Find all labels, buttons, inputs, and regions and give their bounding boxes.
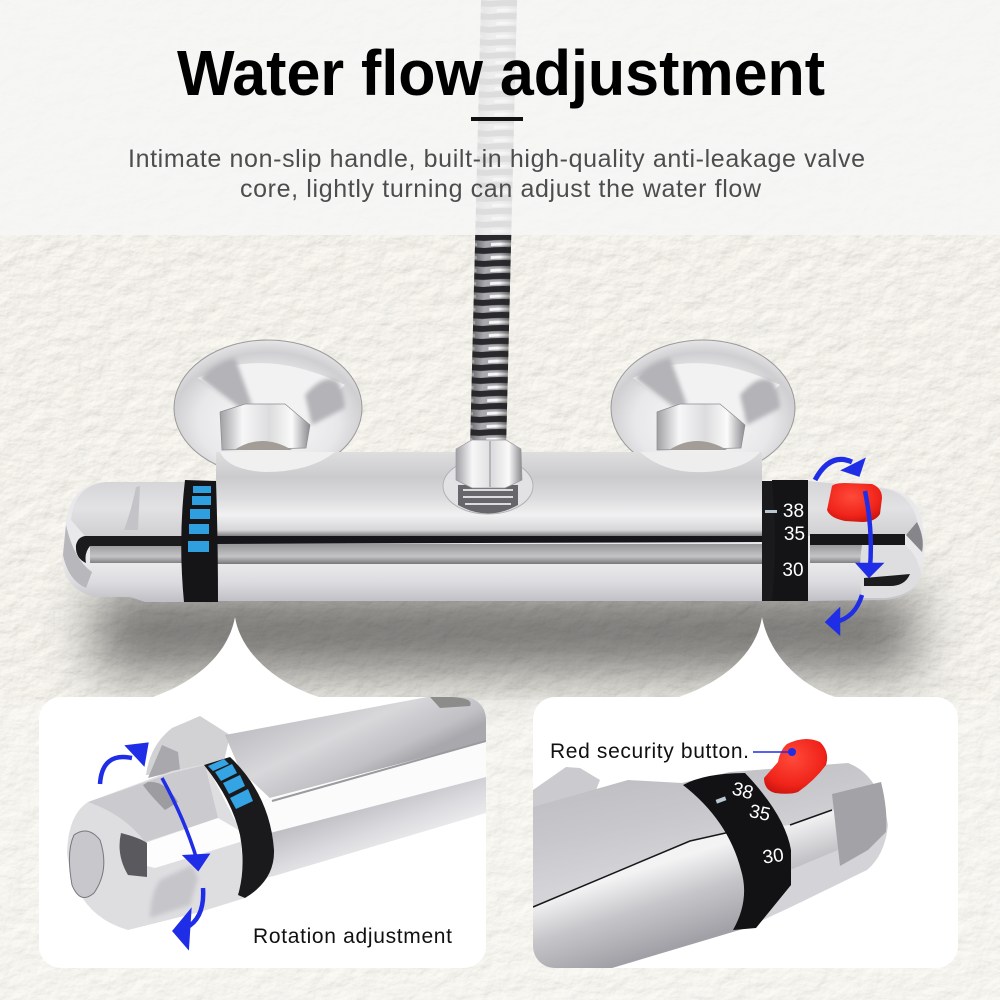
subtitle <box>128 145 865 203</box>
rotation arrows on valve <box>815 459 879 631</box>
temperature ring: 38 <box>783 501 804 522</box>
panel: red security button <box>533 697 958 968</box>
title: Water flow adjustment <box>177 37 825 109</box>
valve body <box>62 440 924 602</box>
valve close-up right: 38 <box>730 779 756 804</box>
right end cap <box>808 481 924 601</box>
top arc arrow <box>815 459 862 480</box>
header band <box>0 0 1000 235</box>
callout pointer left <box>153 617 319 697</box>
label: rotation adjustment: Rotation adjustment <box>253 925 452 948</box>
temperature ring <box>762 480 810 601</box>
left end cap <box>62 482 186 602</box>
shadow under valve <box>95 590 915 672</box>
central body <box>216 452 762 601</box>
temperature ring: 35 <box>784 524 805 545</box>
flexible hose <box>470 0 517 445</box>
middle arrow <box>860 491 879 575</box>
temperature ring: 30 <box>782 560 804 581</box>
subtitle: Intimate non-slip handle, built-in high-quality anti-leakage valve <box>128 145 865 173</box>
label: red security button: Red security button. <box>550 740 749 763</box>
valve close-up right <box>533 763 888 968</box>
valve close-up right: 35 <box>747 801 772 826</box>
red security button <box>827 483 882 522</box>
title underline <box>471 117 523 121</box>
lighter wall at bottom <box>0 700 1000 1000</box>
rotation arrows <box>100 745 206 945</box>
blue scale ring <box>181 480 218 602</box>
hose connector nut <box>443 440 533 514</box>
red security button <box>764 739 827 794</box>
right wall mount <box>611 340 795 476</box>
valve close-up right: 30 <box>761 845 785 869</box>
callout pointer right <box>679 617 835 697</box>
panel: rotation adjustment <box>39 697 486 968</box>
left wall mount <box>174 340 362 476</box>
pointer line <box>753 748 796 756</box>
bottom arrow <box>828 595 862 631</box>
subtitle: core, lightly turning can adjust the water flow <box>240 175 762 203</box>
valve close-up left <box>67 697 486 930</box>
